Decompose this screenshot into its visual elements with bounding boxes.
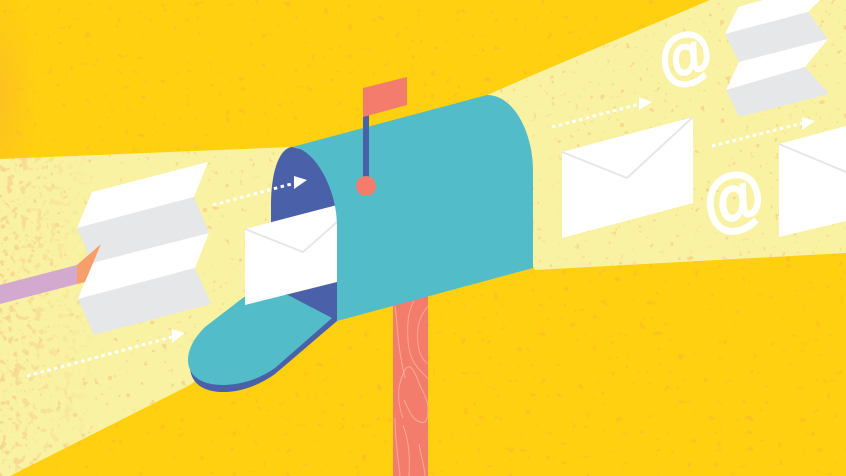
pencil xyxy=(0,244,101,304)
flag pole xyxy=(363,115,369,179)
post xyxy=(393,295,428,476)
mailbox body xyxy=(292,95,533,321)
arrow: far right xyxy=(712,117,815,146)
envelope: right xyxy=(562,117,693,238)
flag banner xyxy=(363,77,407,117)
envelope: far right xyxy=(779,126,846,237)
light beam: left xyxy=(0,147,340,476)
envelope in mailbox xyxy=(245,205,337,305)
arrow: lower left xyxy=(27,329,185,376)
folded letter: left xyxy=(77,162,211,335)
at sign: upper: @ xyxy=(650,17,719,97)
mailbox door flap xyxy=(188,295,332,385)
light beam: right xyxy=(487,0,846,270)
arrow: upper right xyxy=(552,97,652,127)
open door underside xyxy=(190,318,337,392)
pencil tip over letter edge xyxy=(77,244,101,284)
mailbox interior xyxy=(271,147,345,322)
wood grain xyxy=(395,301,428,476)
flag xyxy=(356,77,407,196)
at sign: lower: @ xyxy=(693,154,771,245)
arrow: inside mailbox xyxy=(213,176,307,205)
flag pivot xyxy=(356,176,376,196)
folded letter: top right xyxy=(725,0,829,117)
